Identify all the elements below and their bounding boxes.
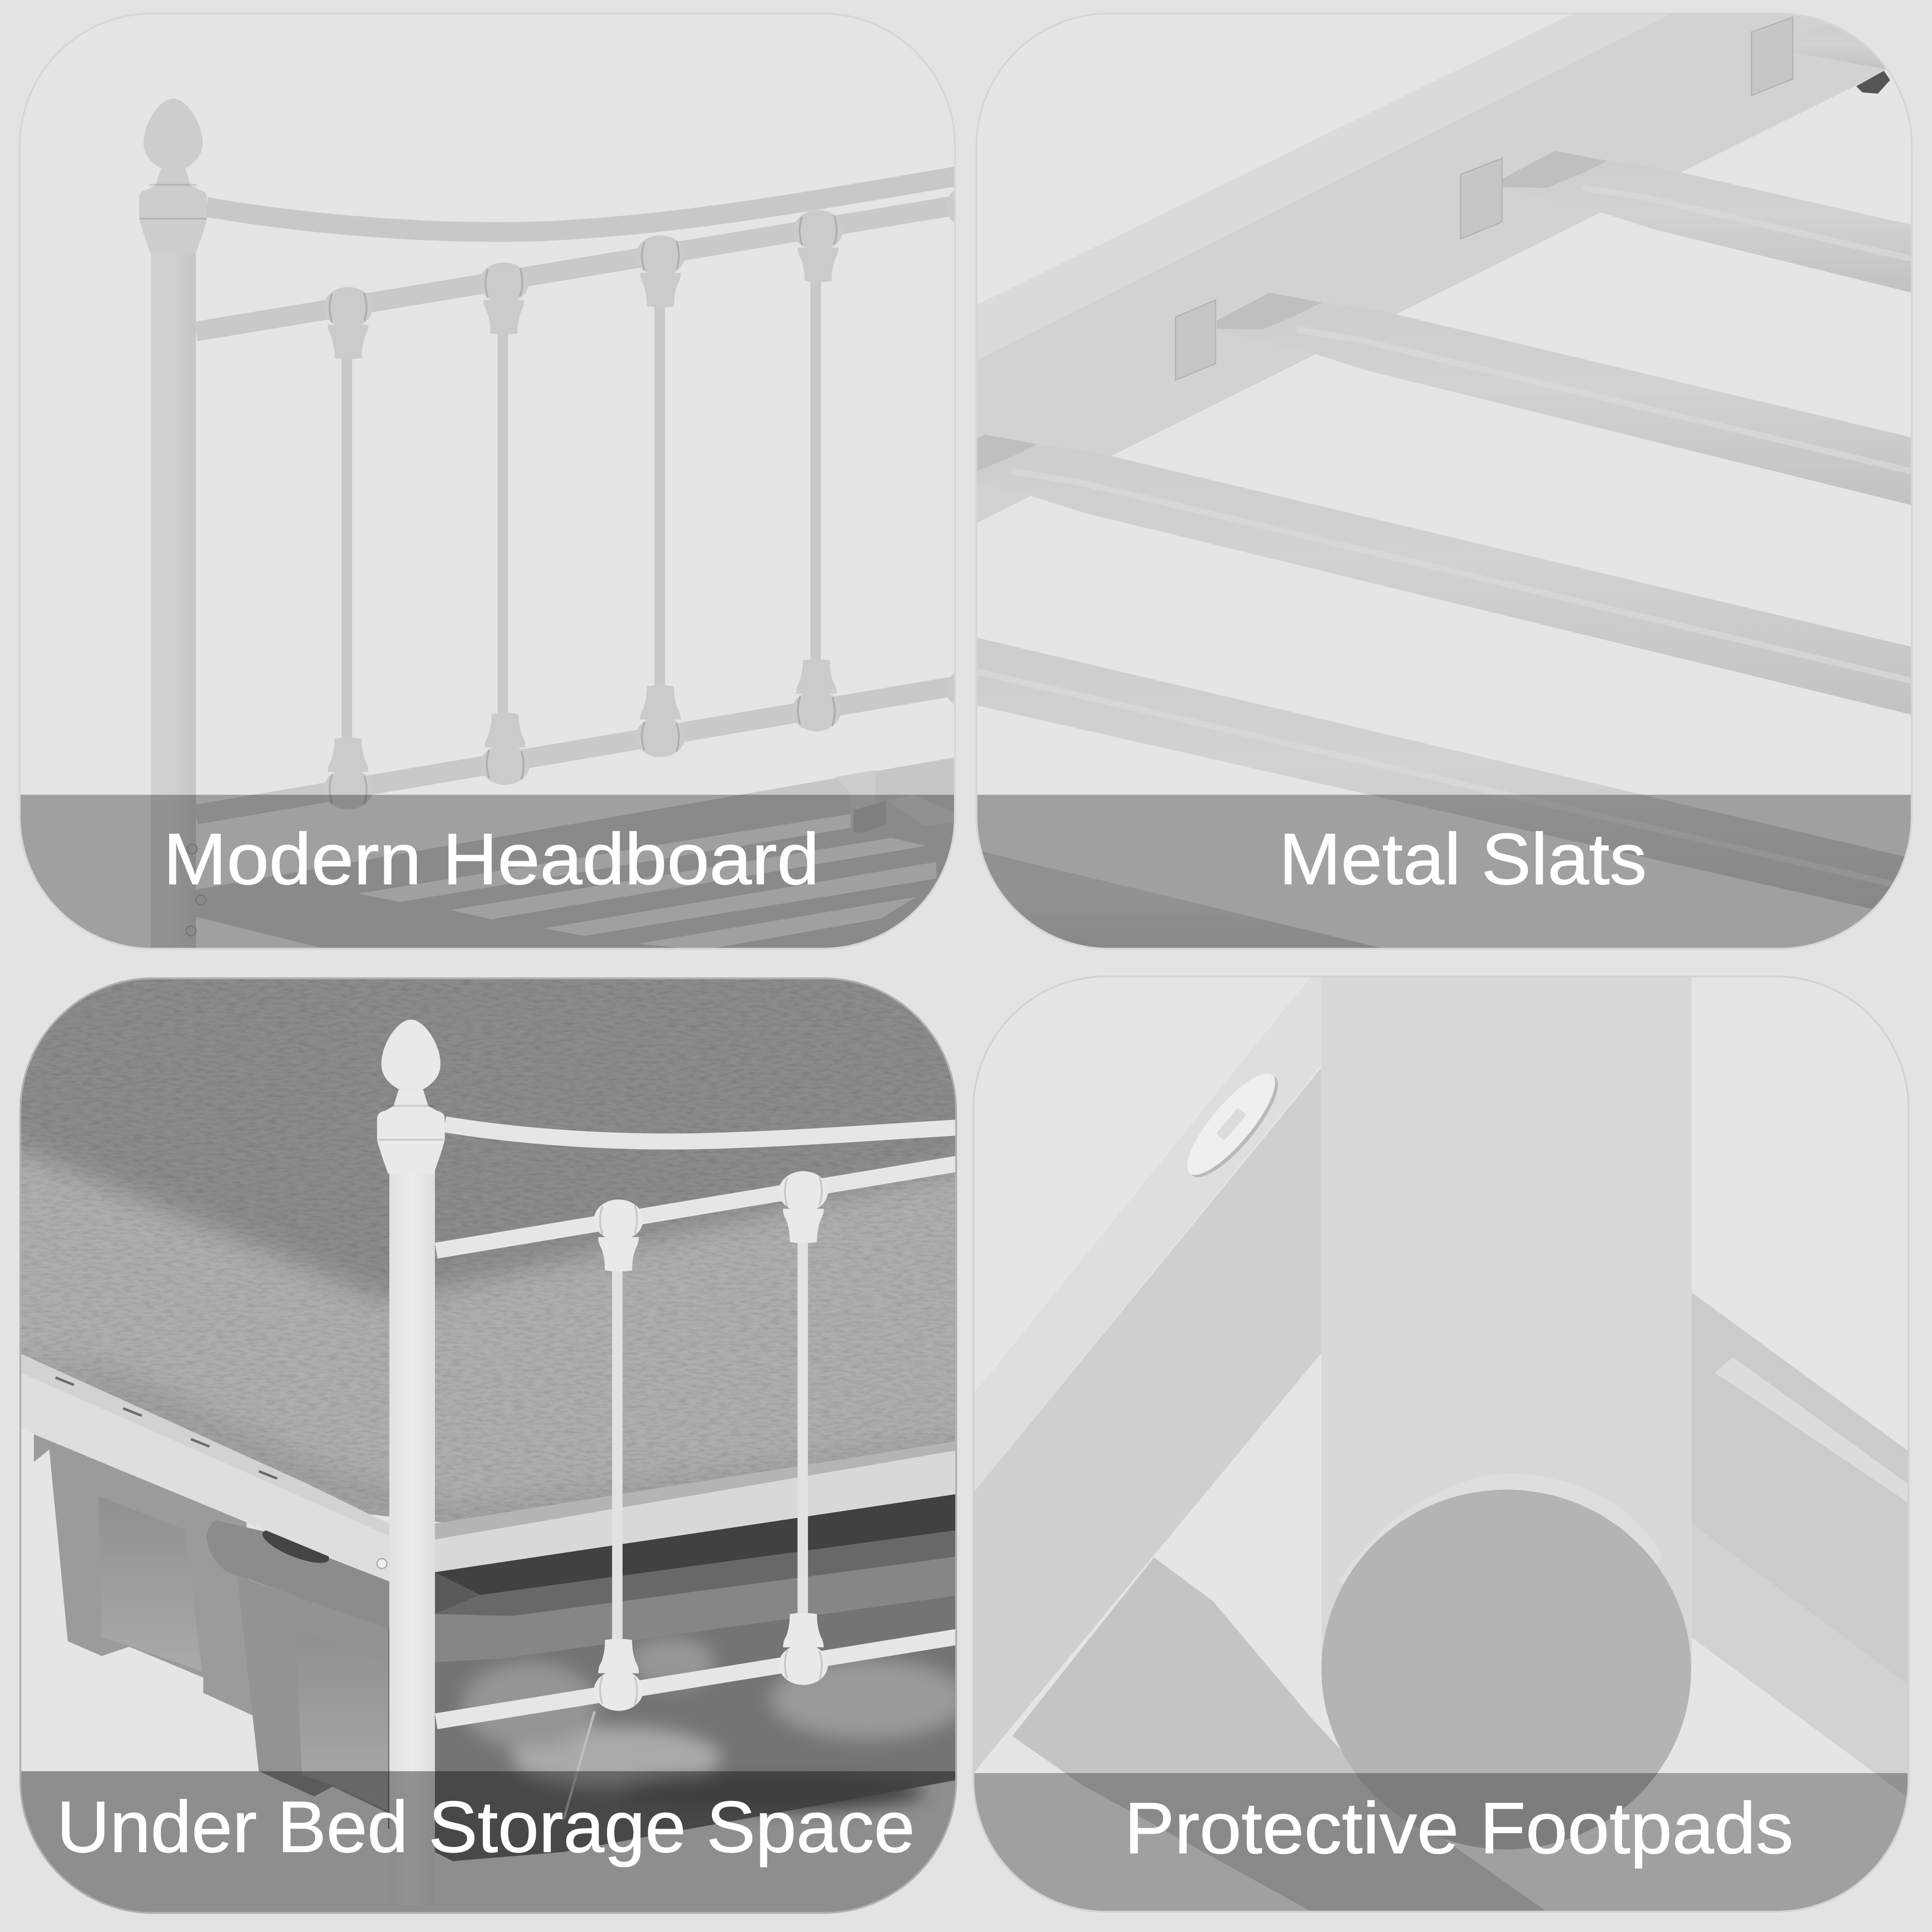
flattened slat ends (932, 151, 1607, 471)
caption: Protective Footpads: Protective Footpads (1124, 1787, 1793, 1868)
caption band (0, 795, 986, 955)
washer bolt (1175, 1063, 1290, 1188)
lower rail (196, 685, 961, 814)
footboard spindles (617, 1237, 803, 1653)
panel: under bed storage space (0, 966, 986, 1919)
storage bin: rear (34, 1422, 258, 1718)
mounting plates (1176, 17, 1793, 380)
vertical spindles (347, 274, 816, 748)
caption: Modern Headboard: Modern Headboard (163, 818, 819, 899)
storage bin: front with contents (207, 1493, 967, 1861)
caption band (966, 1773, 1932, 1921)
caption: Under Bed Storage Space: Under Bed Storage Space (57, 1786, 915, 1867)
footboard post (389, 1170, 435, 1905)
mattress (0, 966, 986, 1582)
rod highlights (976, 188, 1912, 888)
caption: Metal Slats: Metal Slats (1279, 818, 1647, 899)
caption band (0, 1771, 986, 1919)
rail knots (323, 188, 983, 810)
bed frame rails (20, 1354, 961, 1582)
frame bolts (186, 844, 206, 936)
headboard post (151, 246, 196, 949)
lower left strut (1012, 1558, 1551, 1915)
footboard rails (436, 1124, 961, 1721)
footboard finial and knots (377, 1020, 828, 1711)
panel: metal slats (932, 14, 1932, 955)
slat rods (932, 24, 1912, 952)
finial and post cap (139, 99, 207, 252)
footpad (1321, 1490, 1691, 1850)
central post (1321, 976, 1692, 1665)
top curved rail (207, 176, 961, 232)
side rail and slats beneath the headboard (196, 757, 961, 961)
right tube (1692, 1293, 1915, 1803)
left angled beam (973, 976, 1321, 1773)
panel: modern headboard (0, 14, 986, 961)
side beam (976, 14, 1927, 523)
middle rail (196, 204, 961, 331)
panel: protective footpads (966, 976, 1932, 1921)
caption band (966, 795, 1932, 955)
